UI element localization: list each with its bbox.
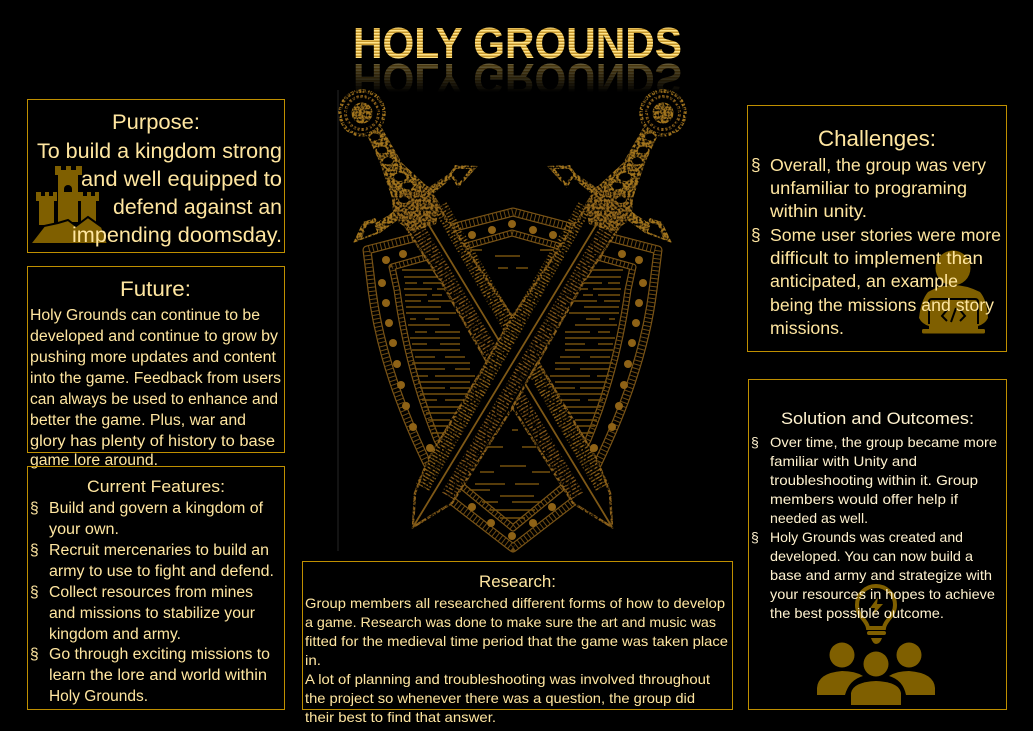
text: research description [305,595,728,725]
heading: current features: Current Features: [87,477,225,496]
text: purpose statement: impending doomsday. [72,224,282,247]
panel: solution and outcomes [748,380,1006,710]
text: purpose statement: defend against an [113,196,282,219]
text: future description [30,307,281,469]
text: future description: glory has plenty of history to base [30,433,275,450]
list: solution and outcomes: base and army and strategize with [770,567,992,583]
list: solution and outcomes: your resources in hopes to achieve [770,586,995,602]
title [356,28,680,89]
icon: light bulb [857,586,895,644]
text: research description: a game. Research was done to make sure the art and music was [305,614,716,630]
text: research description: fitted for the medieval time period that the game was taken place [305,633,728,649]
list: features: Go through exciting missions to [49,646,270,663]
list: features: § [30,542,39,559]
list: challenges: § [751,155,761,175]
list: features: § [30,500,39,517]
list: features: kingdom and army. [49,626,181,643]
list: solution and outcomes: Over time, the group became more [770,434,997,450]
text: future description: into the game. Feedback from users [30,370,281,387]
text: future description: better the game. Plus, war and [30,412,246,429]
list: challenges: anticipated, an example [770,271,958,291]
heading: purpose: Purpose: [112,111,200,134]
text: purpose statement: and well equipped to [81,168,282,191]
list: challenges: missions. [770,318,844,338]
text: future description: can always be used to enhance and [30,391,278,408]
text: future description: developed and continue to grow by [30,328,278,345]
list: features: Collect resources from mines [49,584,253,601]
icon: team with light bulb [817,586,935,705]
list: features: your own. [49,521,119,538]
list: challenges: Some user stories were more [770,225,1001,245]
text: purpose statement: To build a kingdom strong [37,140,282,163]
list: features: Holy Grounds. [49,688,148,705]
text: research description: Group members all researched different forms of how to develop [305,595,725,611]
panel: research [302,562,732,725]
list: challenges [751,155,1001,338]
list: features: learn the lore and world within [49,667,267,684]
list: features: army to use to fight and defend. [49,563,274,580]
list: solution and outcomes [751,434,997,621]
text: research description: A lot of planning and troubleshooting was involved throughout [305,671,710,687]
text: purpose statement [37,140,282,247]
list: challenges: being the missions and story [770,295,994,315]
text: research description: in. [305,652,321,668]
list: solution and outcomes: § [751,434,759,450]
text: research description: their best to find that answer. [305,709,496,725]
list: solution and outcomes: Holy Grounds was created and [770,529,963,545]
list: challenges: Overall, the group was very [770,155,986,175]
list: solution and outcomes: § [751,529,759,545]
list: features [30,500,274,705]
text: future description: pushing more updates and content [30,349,277,366]
sword: left [340,91,612,527]
heading: solution and outcomes: Solution and Outcomes: [781,410,974,428]
panel: current features [28,466,284,710]
list: solution and outcomes: familiar with Unity and [770,453,917,469]
list: solution and outcomes: developed. You can now build a [770,548,973,564]
list: features: § [30,584,39,601]
list: solution and outcomes: needed as well. [770,510,868,526]
list: solution and outcomes: members would offer help if [770,491,958,507]
shield [367,212,658,548]
list: features: Recruit mercenaries to build an [49,542,269,559]
text: future description: Holy Grounds can continue to be [30,307,260,324]
list: features: Build and govern a kingdom of [49,500,264,517]
list: features: § [30,646,39,663]
title: HOLY GROUNDS [353,54,682,102]
icon: castle [30,166,108,244]
title: HOLY GROUNDS [353,20,682,68]
list: challenges: § [751,225,761,245]
list: solution and outcomes: the best possible outcome. [770,605,944,621]
icon: coder at laptop [919,250,988,334]
heading: research: Research: [479,572,556,591]
illustration: shield with crossed swords [340,91,685,548]
heading: future: Future: [120,278,191,301]
sword: right [413,91,685,527]
list: solution and outcomes: troubleshooting within it. Group [770,472,978,488]
list: challenges: difficult to implement than [770,248,983,268]
text: future description: game lore around. [30,452,158,469]
panel: future [28,266,284,469]
heading: challenges: Challenges: [818,126,936,151]
list: challenges: within unity. [769,201,867,221]
list: features: and missions to stabilize your [49,605,255,622]
list: challenges: unfamiliar to programing [770,178,967,198]
panel: challenges [748,106,1006,352]
panel: purpose [28,100,284,252]
text: research description: the project so whenever there was a question, the group did [305,690,695,706]
